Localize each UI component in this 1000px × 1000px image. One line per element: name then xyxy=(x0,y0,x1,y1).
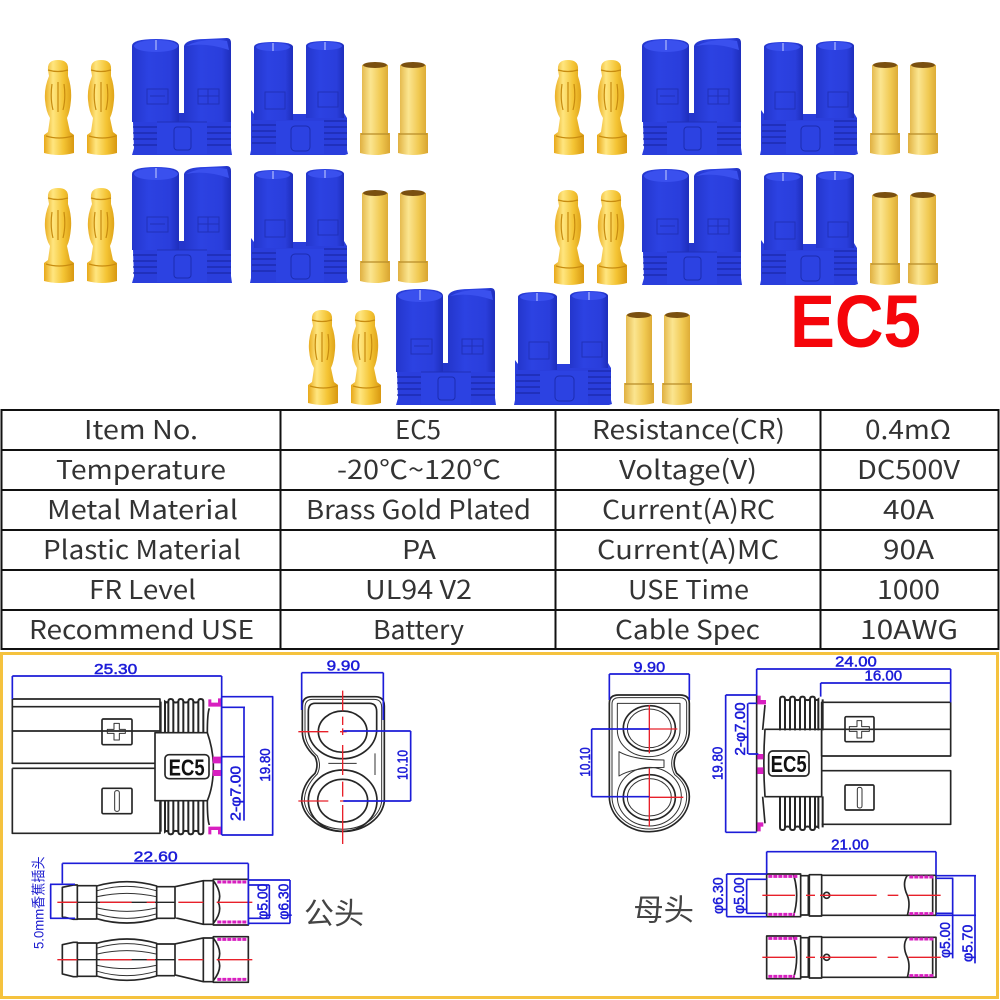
female dimensions: 16.00 xyxy=(864,669,902,685)
female dimensions: φ5.00 xyxy=(732,877,748,914)
male connector side view xyxy=(12,697,222,835)
female dimensions: 2-φ7.00 xyxy=(733,702,749,756)
specification table: Battery xyxy=(373,610,464,647)
specification table: DC500V xyxy=(857,450,960,487)
female pins xyxy=(762,874,941,979)
male connector side view: EC5 xyxy=(169,754,205,780)
female connector side view: EC5 xyxy=(771,751,807,777)
specification table: Current(A)MC xyxy=(597,530,779,567)
specification table: 10AWG xyxy=(860,610,958,647)
product photo set: top right xyxy=(554,38,938,155)
product photo set: top left xyxy=(44,38,428,155)
female dimensions: φ6.30 xyxy=(711,877,727,914)
specification table: Metal Material xyxy=(47,490,238,527)
female connector side view xyxy=(757,695,951,832)
specification table: Voltage(V) xyxy=(619,450,757,487)
male dimensions: φ5.00 xyxy=(256,884,272,920)
specification table: PA xyxy=(402,530,436,567)
female dimensions: 21.00 xyxy=(831,837,869,853)
female dimensions: 10.10 xyxy=(578,747,594,777)
female dimensions: 24.00 xyxy=(835,655,877,671)
label: male: 公头 xyxy=(304,889,364,933)
male connector end view xyxy=(298,691,384,844)
specification table: USE Time xyxy=(628,570,749,607)
specification table: 1000 xyxy=(877,570,940,607)
specification table xyxy=(1,410,999,649)
female dimensions: 19.80 xyxy=(710,747,726,780)
product photo set: middle right xyxy=(554,168,938,285)
specification table: Current(A)RC xyxy=(602,490,775,527)
specification table: Recommend USE xyxy=(29,610,254,647)
drawing: male connector (left half) xyxy=(12,659,412,982)
label: female: 母头 xyxy=(633,886,694,930)
specification table: -20℃~120℃ xyxy=(337,450,501,487)
specification table: Plastic Material xyxy=(43,530,241,567)
specification table: 40A xyxy=(883,490,934,527)
male dimensions: 19.80 xyxy=(258,748,274,782)
female dimensions: 9.90 xyxy=(633,660,665,676)
specification table: UL94 V2 xyxy=(365,570,472,607)
specification table: 0.4mΩ xyxy=(865,410,951,447)
specification table: Cable Spec xyxy=(615,610,760,647)
male banana pins xyxy=(57,879,252,982)
specification table: EC5 xyxy=(395,410,441,447)
male dimensions: 9.90 xyxy=(327,659,360,675)
male dimensions: 2-φ7.00 xyxy=(229,766,245,821)
specification table: Item No. xyxy=(84,410,198,447)
male dimensions xyxy=(12,659,412,949)
male dimensions: φ6.30 xyxy=(277,884,293,920)
male dimensions: 5.0mm香蕉插头 xyxy=(30,856,46,949)
specification table: Brass Gold Plated xyxy=(306,490,531,527)
male dimensions: 22.60 xyxy=(134,849,178,865)
product photo set: middle left xyxy=(44,166,428,283)
specification table: FR Level xyxy=(89,570,196,607)
male dimensions: 10.10 xyxy=(396,750,412,780)
specification table: Temperature xyxy=(56,450,226,487)
specification table: Resistance(CR) xyxy=(592,410,785,447)
female dimensions: φ5.00 xyxy=(938,922,954,958)
panel: technical drawings xyxy=(2,654,998,998)
male dimensions: 25.30 xyxy=(94,662,137,678)
female connector end view xyxy=(609,695,689,832)
heading: EC5: EC5 xyxy=(790,280,921,363)
drawing: female connector (right half) xyxy=(578,655,977,979)
female dimensions: φ5.70 xyxy=(961,925,977,962)
female dimensions xyxy=(578,655,977,963)
product photo set: bottom centre xyxy=(308,288,692,405)
specification table: 90A xyxy=(883,530,934,567)
